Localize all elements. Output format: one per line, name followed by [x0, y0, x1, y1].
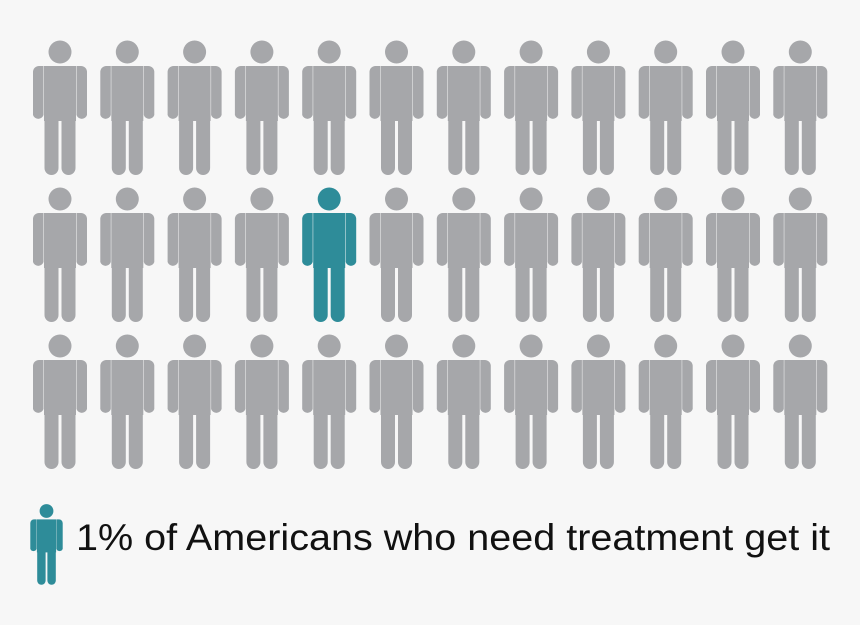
legend icon: teal person: [30, 504, 63, 585]
highlighted teal person: [302, 188, 356, 322]
pictogram grid: gray people: [33, 40, 827, 469]
legend text: 1% of Americans who need treatment get it: [76, 517, 831, 558]
